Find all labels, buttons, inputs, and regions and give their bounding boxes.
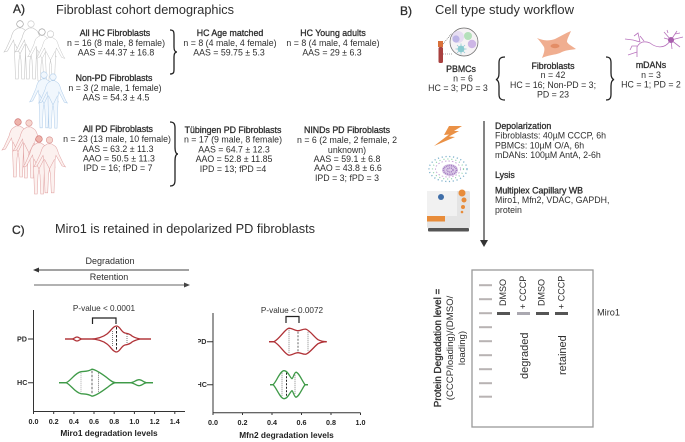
axis labels: HC [17, 378, 27, 387]
text: Tubingen PD fibroblasts: AAO = 52.8 ± 11.85 [196, 154, 273, 164]
text: PBMCs: n = 6 [453, 74, 473, 84]
heading: cell type study workflow: Cell type study workflow [435, 2, 575, 17]
text: NINDs PD fibroblasts: NINDs PD Fibroblasts [304, 125, 391, 135]
bracket: left brace [496, 57, 505, 100]
text: all HC fibroblasts [67, 28, 165, 58]
bracket: HC groups [170, 30, 177, 74]
chart: western blot schematic [472, 270, 593, 427]
icon: capillary western machine [427, 190, 470, 232]
text: non-PD fibroblasts: n = 3 (2 male, 1 female) [68, 83, 162, 93]
text: fibroblasts [510, 61, 596, 100]
icon: lightning bolt [434, 126, 462, 146]
degraded and retained labels: retained [557, 335, 569, 375]
chart: Miro1 violin plot [17, 304, 185, 438]
panel: A fibroblast cohort demographics [2, 2, 397, 194]
text: HC age matched: n = 8 (4 male, 4 female) [183, 38, 277, 48]
text: degradation formula: (CCCP/loading)/(DMSO/ [445, 295, 456, 400]
panel label C: C) [12, 223, 25, 237]
panel: C Miro1 retention charts [12, 221, 366, 440]
axis labels: PD [17, 334, 27, 344]
arrow: workflow [480, 121, 488, 247]
text: all PD fibroblasts: AAS = 63.2 ± 11.3 [83, 144, 154, 154]
axis labels: HC [196, 380, 207, 389]
text: HC young adults: HC Young adults [300, 28, 366, 38]
lane labels: + CCCP [556, 276, 566, 309]
text: depolarization: mDANs: 100µM AntA, 2-6h [495, 150, 601, 160]
arrow: retention: Retention [90, 272, 128, 282]
axis labels: 0.4 [69, 417, 79, 426]
text: HC age matched: AAS = 59.75 ± 5.3 [193, 48, 265, 58]
axis labels: 1.4 [170, 417, 180, 426]
axis labels: 1.0 [129, 417, 139, 426]
text: NINDs PD fibroblasts: unknown) [328, 145, 366, 155]
text: fibroblasts: Fibroblasts [531, 61, 575, 71]
axis labels: 0.0 [28, 417, 38, 426]
text: HC young adults: n = 8 (4 male, 4 female) [286, 38, 380, 48]
text: NINDs PD fibroblasts: AAS = 59.1 ± 6.8 [314, 154, 380, 164]
label: Miro1 band: Miro1 [597, 308, 620, 318]
p-value annotation [73, 304, 136, 324]
bracket: PD groups [170, 122, 178, 186]
axis labels: Mfn2 degradation levels [239, 430, 334, 440]
text: all HC fibroblasts: AAS = 44.37 ± 16.8 [78, 48, 154, 58]
text: multiplex capillary WB [495, 186, 609, 215]
bracket: right brace [606, 57, 614, 100]
text: all PD fibroblasts: IPD = 16; fPD = 7 [84, 163, 153, 173]
axis labels: 0.2 [238, 418, 248, 427]
panel label B: B) [400, 4, 412, 18]
panel: B cell type study workflow [400, 2, 683, 427]
degraded and retained labels [519, 332, 569, 379]
axis labels: 0.0 [208, 418, 218, 427]
lane labels: DMSO [498, 279, 508, 306]
text: mDANs [621, 60, 681, 90]
text: non-PD fibroblasts: AAS = 54.3 ± 4.5 [83, 92, 149, 102]
text: fibroblasts: n = 42 [541, 70, 565, 80]
axes [207, 313, 360, 415]
p-value annotation [261, 306, 324, 323]
icon: healthy control people [4, 21, 65, 82]
violin: HC [59, 369, 153, 396]
text: fibroblasts: HC = 16; Non-PD = 3; [510, 80, 596, 90]
violin: PD [269, 328, 327, 355]
text: NINDs PD fibroblasts: AAO = 43.8 ± 6.6 [314, 163, 382, 173]
text: Tubingen PD fibroblasts: AAS = 64.7 ± 12.3 [198, 144, 270, 154]
text: Tubingen PD fibroblasts [184, 125, 282, 174]
text: HC young adults: AAS = 29 ± 6.3 [302, 48, 362, 58]
axis labels: 0.2 [49, 417, 59, 426]
chart: Mfn2 violin plot [196, 306, 366, 440]
text: depolarization [495, 121, 606, 160]
text: Tubingen PD fibroblasts: IPD = 13; fPD =4 [200, 164, 266, 174]
axis labels: Miro1 degradation levels [60, 428, 158, 438]
text: non-PD fibroblasts: Non-PD Fibroblasts [76, 73, 153, 83]
p-value annotation: P-value < 0.0001 [73, 304, 136, 313]
text: degradation formula: Protein Degradation level = [433, 288, 444, 407]
text: all PD fibroblasts: AAO = 50.5 ± 11.3 [83, 154, 155, 164]
ladder [479, 284, 492, 398]
text: all HC fibroblasts: All HC Fibroblasts [80, 28, 151, 38]
text: mDANs: HC = 1; PD = 2 [621, 80, 681, 90]
text: Tubingen PD fibroblasts: Tübingen PD Fibroblasts [185, 125, 282, 135]
text: Tubingen PD fibroblasts: n = 17 (9 male, 8 female) [184, 134, 282, 144]
text: HC age matched: HC Age matched [197, 28, 263, 38]
text: PBMCs: PBMCs [446, 64, 477, 74]
lane labels [498, 276, 566, 309]
heading: Miro1 is retained: Miro1 is retained in depolarized PD fibroblasts [55, 221, 315, 236]
heading: fibroblast cohort demographics: Fibroblast cohort demographics [56, 2, 234, 17]
icon: dopaminergic neuron [625, 30, 683, 57]
panel label A: A) [13, 2, 25, 16]
text: mDANs: mDANs [636, 60, 667, 70]
lane labels: + CCCP [518, 276, 528, 309]
violin: HC [270, 371, 308, 399]
text: PBMCs [428, 64, 488, 93]
text: all PD fibroblasts [63, 124, 171, 173]
axis labels: 1.2 [150, 417, 160, 426]
text: multiplex capillary WB: protein [495, 205, 522, 215]
axis labels: 0.8 [109, 417, 119, 426]
icon: non-PD people [30, 72, 67, 128]
text: multiplex capillary WB: Miro1, Mfn2, VDAC, GAPDH, [495, 195, 609, 205]
text: all PD fibroblasts: n = 23 (13 male, 10 female) [63, 134, 171, 144]
violin: PD [65, 326, 151, 352]
text: PBMCs: HC = 3; PD = 3 [428, 83, 488, 93]
text: lysis: Lysis [495, 170, 515, 180]
text: NINDs PD fibroblasts [297, 125, 397, 183]
text: multiplex capillary WB: Multiplex Capillary WB [495, 186, 583, 196]
axis labels: 0.8 [326, 418, 336, 427]
axis labels: 0.6 [296, 418, 306, 427]
axis labels: 0.6 [89, 417, 99, 426]
axis labels: 0.4 [267, 418, 277, 427]
text: HC age matched [183, 28, 277, 58]
axis labels: PD [196, 337, 206, 346]
axis labels [196, 337, 366, 440]
lane labels: DMSO [536, 279, 546, 306]
arrow: retention [34, 272, 190, 288]
text: NINDs PD fibroblasts: n = 6 (2 male, 2 female, 2 [297, 135, 397, 145]
arrow: degradation: Degradation [85, 256, 135, 266]
text: NINDs PD fibroblasts: IPD = 3; fPD = 3 [315, 173, 379, 183]
text: non-PD fibroblasts [68, 73, 162, 102]
axes [28, 310, 185, 414]
degraded and retained labels: degraded [519, 332, 531, 379]
text: mDANs: n = 3 [641, 70, 661, 80]
icon: cell lysate [429, 156, 467, 182]
arrow: degradation [33, 256, 189, 272]
text: degradation formula: loading) [457, 331, 468, 365]
text: depolarization: PBMCs: 10µM O/A, 6h [495, 140, 584, 150]
axis labels: 1.0 [356, 418, 366, 427]
icon: PD patients people [2, 119, 66, 194]
text: depolarization: Fibroblasts: 40µM CCCP, 6h [495, 130, 606, 140]
axis labels [17, 334, 180, 438]
text: all PD fibroblasts: All PD Fibroblasts [83, 124, 154, 134]
icon: fibroblast cell [537, 31, 576, 58]
text: fibroblasts: PD = 23 [537, 90, 569, 100]
p-value annotation: P-value < 0.0072 [261, 306, 324, 315]
text: HC young adults [286, 28, 380, 58]
icon: blood tube and PBMCs [438, 28, 478, 63]
bands [497, 312, 568, 315]
text: all HC fibroblasts: n = 16 (8 male, 8 female) [67, 38, 165, 48]
text: depolarization: Depolarization [495, 121, 551, 131]
text: degradation formula [433, 288, 468, 407]
